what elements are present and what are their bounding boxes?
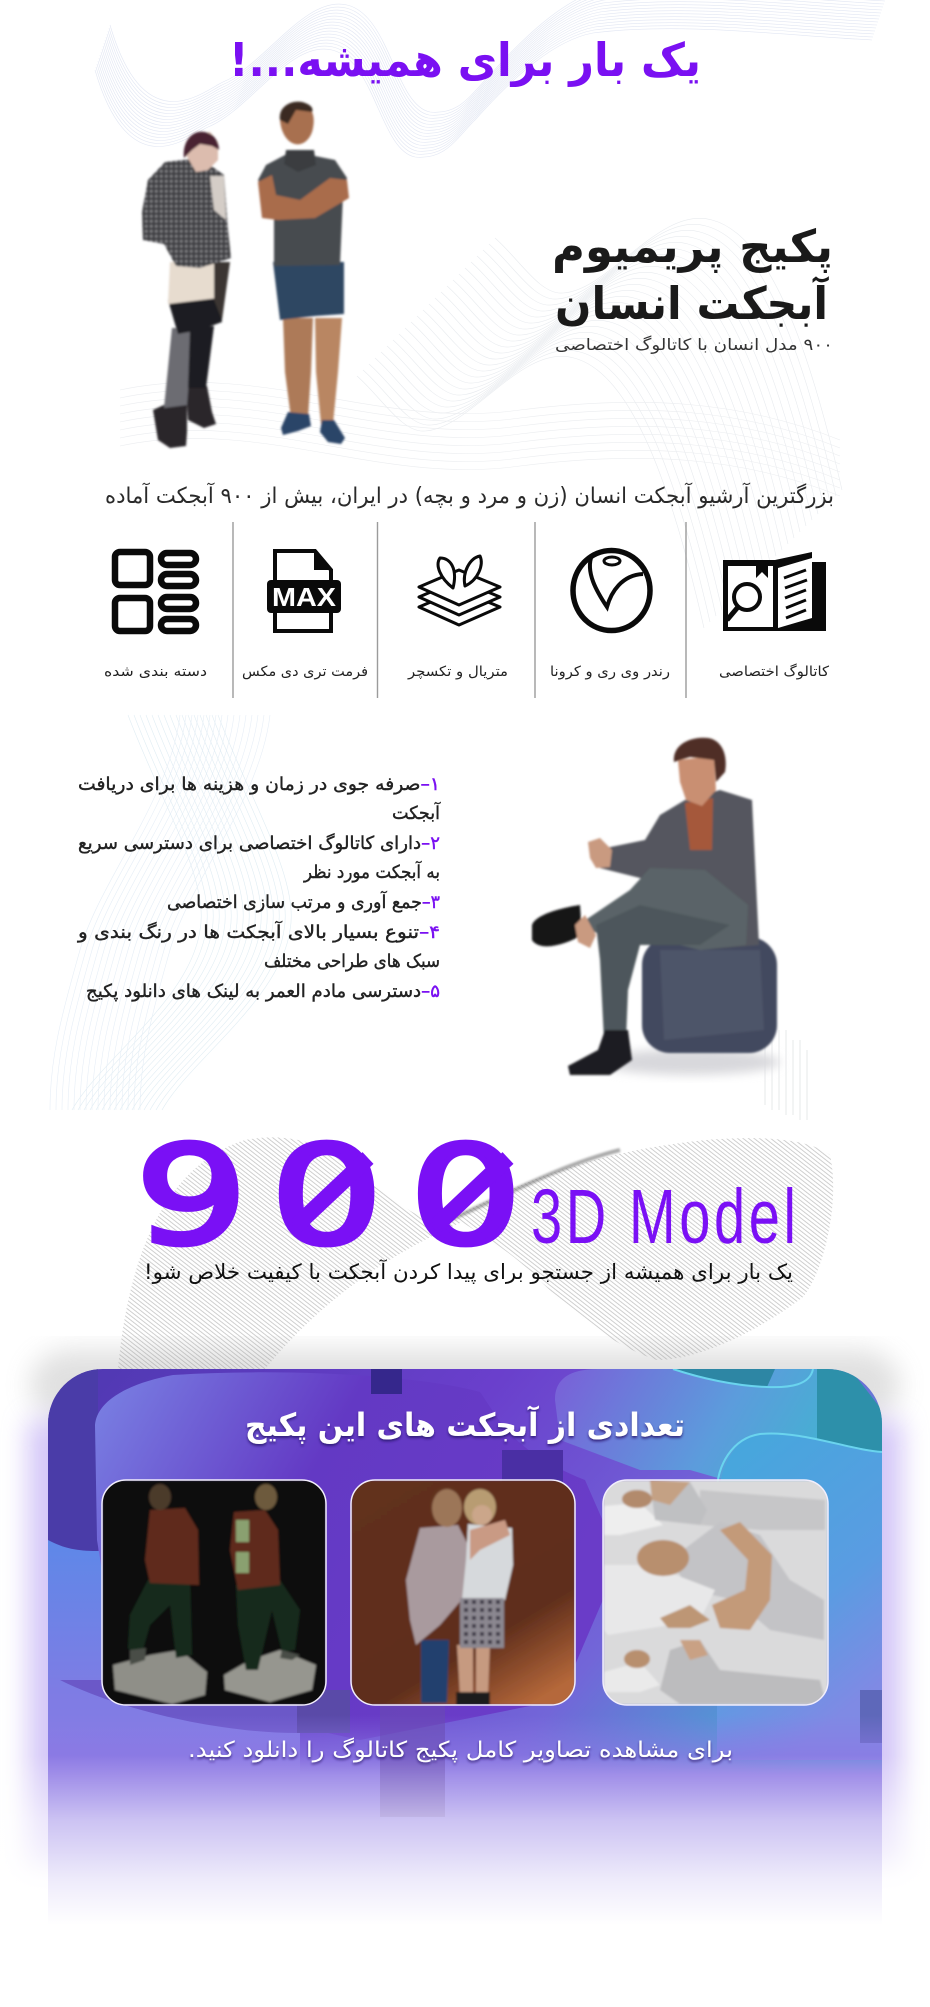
- feature: vray and corona render: رندر وی ری و کرونا: [550, 664, 670, 680]
- subheading: 900 models: ۹۰۰ مدل انسان با کاتالوگ اختصاصی: [555, 335, 833, 355]
- benefits list: ۲–دارای کاتالوگ اختصاصی برای دسترسی سریع: [78, 833, 440, 854]
- feature: categorized: دسته بندی شده: [104, 664, 207, 680]
- 900 counter: 0: [409, 1118, 522, 1276]
- 900 counter: 0: [270, 1118, 383, 1276]
- tagline: بزرگترین آرشیو آبجکت انسان (زن و مرد و بچه) در ایران، بیش از ۹۰۰ آبجکت آماده: [105, 482, 834, 509]
- photo: seated man on pouf: [532, 738, 780, 1075]
- icon: open book with magnifier: [723, 552, 826, 631]
- panel heading: تعدادی از آبجکت های این پکیج: [245, 1405, 685, 1444]
- benefits list: ۴–تنوع بسیار بالای آبجکت ها در رنگ بندی و: [77, 920, 440, 943]
- photo card: man on steps: [102, 1480, 326, 1705]
- benefits list: [77, 774, 441, 1002]
- heading: premium package: آبجکت انسان: [555, 276, 829, 330]
- photo: standing man: [258, 102, 349, 444]
- feature: materials and textures: [407, 556, 508, 680]
- feature: exclusive catalog: کاتالوگ اختصاصی: [719, 662, 829, 680]
- benefits list: به آبجکت مورد نظر: [303, 860, 440, 883]
- gray line mesh ribbon: [118, 1137, 833, 1369]
- catalog call to action: برای مشاهده تصاویر کامل پکیج کاتالوگ را دانلود کنید.: [188, 1737, 733, 1763]
- 900 counter: 9: [135, 1118, 248, 1276]
- 3D model label: 3D Model: [531, 1174, 796, 1260]
- benefits list: آبجکت: [392, 801, 441, 824]
- photo card: sleeping man: [603, 1480, 828, 1705]
- benefits list: ۵–دسترسی مادم العمر به لینک های دانلود پکیج: [86, 981, 440, 1002]
- feature: exclusive catalog: [719, 552, 829, 680]
- feature: 3ds max format: [242, 551, 368, 680]
- panel: sample objects: [48, 1369, 882, 1930]
- panel background: [48, 1369, 882, 1930]
- heading: premium package: پکیج پریمیوم: [552, 220, 833, 273]
- icon: max file: MAX: [272, 582, 337, 612]
- icon: vray logo: [573, 550, 650, 630]
- photo: standing woman: [142, 132, 231, 448]
- benefits list: سبک های طراحی مختلف: [264, 951, 440, 972]
- benefits list: ۱–صرفه جوی در زمان و هزینه ها برای دریافت: [78, 774, 440, 795]
- heading: premium package: [552, 220, 833, 330]
- feature: 3ds max format: فرمت تری دی مکس: [242, 664, 368, 680]
- photo card: two children: [351, 1480, 575, 1705]
- feature: categorized: [104, 552, 207, 680]
- feature: vray and corona render: [550, 550, 670, 680]
- feature: materials and textures: متریال و تکسچر: [407, 664, 508, 680]
- slogan: یک بار برای همیشه از جستجو برای پیدا کردن آبجکت با کیفیت خلاص شو!: [144, 1259, 793, 1284]
- 900 counter: [135, 1118, 522, 1276]
- icon: layered materials with leaves: [419, 556, 500, 625]
- benefits list: ۳–جمع آوری و مرتب سازی اختصاصی: [167, 890, 440, 913]
- title: یک بار برای همیشه...!: [229, 33, 701, 87]
- icon: grid list: [115, 552, 196, 631]
